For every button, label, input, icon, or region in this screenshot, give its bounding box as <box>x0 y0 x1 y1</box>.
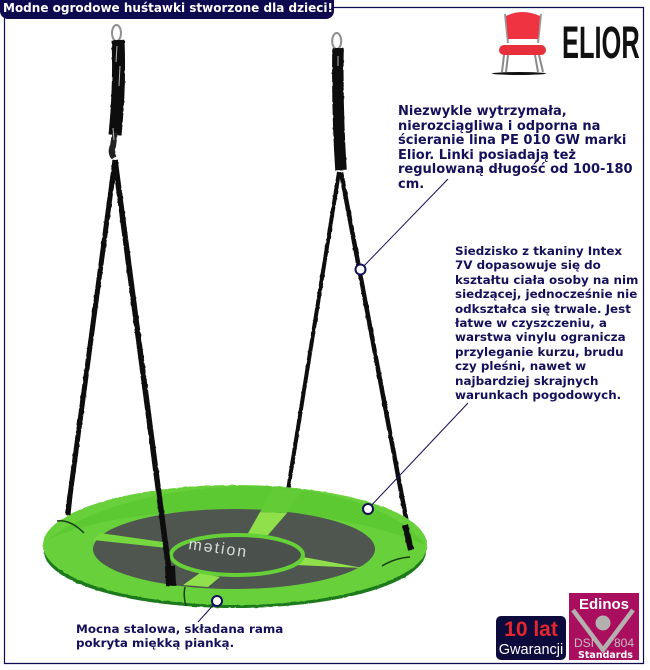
callout: rope <box>398 104 633 192</box>
standards badge: 804 <box>614 636 634 650</box>
callout: seat: kształtu ciała osoby na nim <box>455 273 638 287</box>
warranty badge <box>496 616 566 660</box>
title banner: Modne ogrodowe huśtawki stworzone dla dzieci! <box>3 1 333 15</box>
back ropes <box>69 25 412 550</box>
seat disc: mətion <box>187 536 249 561</box>
warranty badge: 10 lat <box>504 618 558 641</box>
callout: seat: warstwa vinylu ogranicza <box>455 330 626 344</box>
callout: seat: łatwe w czyszczeniu, a <box>455 316 607 330</box>
callout: rope: Elior. Linki posiadają też <box>398 148 576 163</box>
callout: rope: nierozciągliwa i odporna na <box>398 119 600 134</box>
callout: seat: siedzącej, jednocześnie nie <box>455 287 637 301</box>
callout: seat: najbardziej skrajnych <box>455 374 598 388</box>
standards badge: DSI <box>574 636 594 650</box>
callout: seat: czy pleśni, nawet w <box>455 359 586 373</box>
callout: seat: odkształca się trwale. Jest <box>455 302 631 316</box>
warranty badge: Gwarancji <box>499 642 563 658</box>
seat disc <box>43 485 427 608</box>
standards badge: Standards <box>578 650 633 661</box>
brand name: ELIOR <box>562 17 640 68</box>
callout: rope: regulowaną długość od 100-180 <box>398 162 633 177</box>
callout: seat: Siedzisko z tkaniny Intex <box>455 244 622 258</box>
standards badge: Edinos <box>579 596 629 613</box>
callout: frame: Mocna stalowa, składana rama <box>76 622 283 636</box>
callout: rope: Niezwykle wytrzymała, <box>398 104 567 119</box>
callout: rope: ścieranie lina PE 010 GW marki <box>398 133 626 148</box>
callout: rope: cm. <box>398 177 424 192</box>
callout: frame <box>76 622 283 650</box>
callout: seat: warunkach pogodowych. <box>455 388 621 402</box>
callout: frame: pokryta miękką pianką. <box>76 636 234 650</box>
callout: seat: 7V dopasowuje się do <box>455 258 601 272</box>
callout: seat: przyleganie kurzu, brudu <box>455 345 624 359</box>
front ropes <box>68 160 411 586</box>
callout: seat <box>454 244 638 402</box>
